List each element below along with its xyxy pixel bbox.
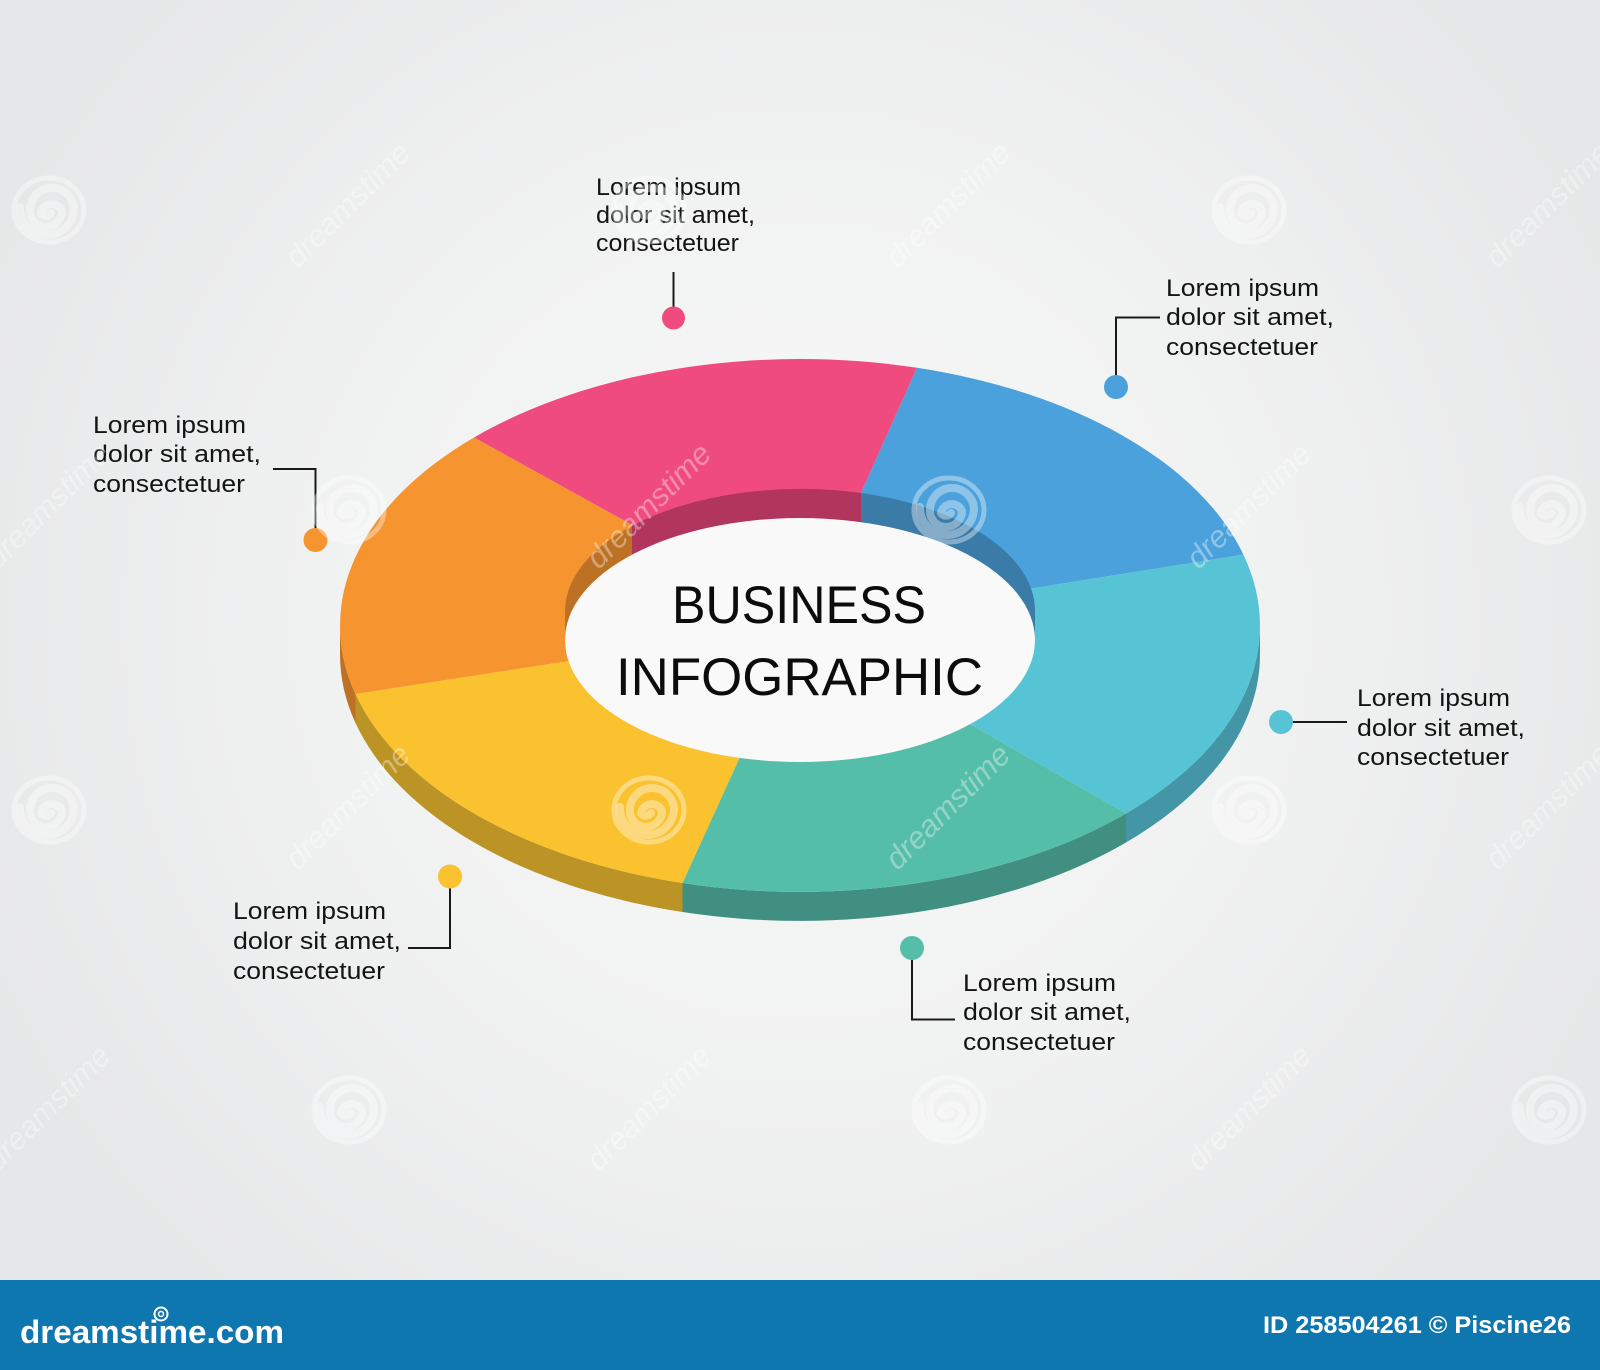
callout: yellow: dolor sit amet,	[233, 928, 401, 955]
callout: orange	[93, 412, 328, 552]
callout: green: Lorem ipsum	[963, 970, 1116, 997]
callout: pink	[596, 174, 755, 330]
segment: yellow	[356, 625, 800, 883]
segment: orange	[340, 438, 800, 694]
callout: blue: dolor sit amet,	[1166, 304, 1334, 331]
callout: blue: consectetuer	[1166, 334, 1318, 361]
callout: orange: consectetuer	[93, 471, 245, 498]
watermark text: dreamstime	[878, 737, 1017, 876]
callout: green	[900, 936, 1131, 1056]
watermark text: dreamstime	[278, 135, 417, 274]
side: orange	[340, 626, 356, 723]
title	[616, 576, 983, 707]
callout: pink: dolor sit amet,	[596, 202, 755, 229]
callout: blue: Lorem ipsum	[1166, 275, 1319, 302]
callout: teal: Lorem ipsum	[1357, 685, 1510, 712]
side: green	[682, 814, 1126, 921]
segment: blue	[800, 368, 1243, 625]
centre hole	[565, 518, 1035, 762]
callout: teal: consectetuer	[1357, 744, 1509, 771]
watermark text: dreamstime	[878, 135, 1017, 274]
watermark spirals	[14, 178, 1584, 1142]
segment: green	[682, 625, 1126, 892]
watermark text	[0, 135, 1600, 1177]
title: BUSINESS	[672, 576, 926, 635]
inner wall: orange	[565, 526, 632, 640]
footer credit: ID 258504261 © Piscine26	[1263, 1312, 1571, 1339]
callout: orange: dolor sit amet,	[93, 441, 261, 468]
watermark text: dreamstime	[579, 436, 718, 575]
footer band	[0, 1280, 1600, 1370]
callout: pink: consectetuer	[596, 230, 739, 257]
callout: orange: Lorem ipsum	[93, 412, 246, 439]
watermark text: dreamstime	[579, 1038, 718, 1177]
callout: teal: dolor sit amet,	[1357, 715, 1525, 742]
watermark text: dreamstime	[1179, 1038, 1318, 1177]
donut chart	[340, 359, 1260, 921]
title: INFOGRAPHIC	[616, 648, 983, 707]
callout: yellow: Lorem ipsum	[233, 898, 386, 925]
inner wall: pink	[632, 489, 861, 640]
callout: teal	[1269, 685, 1525, 771]
callout: yellow: consectetuer	[233, 958, 385, 985]
watermark text: dreamstime	[278, 737, 417, 876]
side: yellow	[356, 694, 682, 912]
side: teal	[1126, 626, 1260, 842]
watermark text: dreamstime	[1179, 436, 1318, 575]
segment: pink	[474, 359, 917, 625]
callout: green: dolor sit amet,	[963, 999, 1131, 1026]
segment: teal	[800, 555, 1260, 814]
footer logo: dreamstime.com	[20, 1314, 284, 1350]
callout: pink: Lorem ipsum	[596, 174, 741, 201]
inner wall: blue	[861, 493, 1035, 640]
callout: green: consectetuer	[963, 1029, 1115, 1056]
callout: blue	[1104, 275, 1334, 399]
callout: yellow	[233, 864, 462, 985]
